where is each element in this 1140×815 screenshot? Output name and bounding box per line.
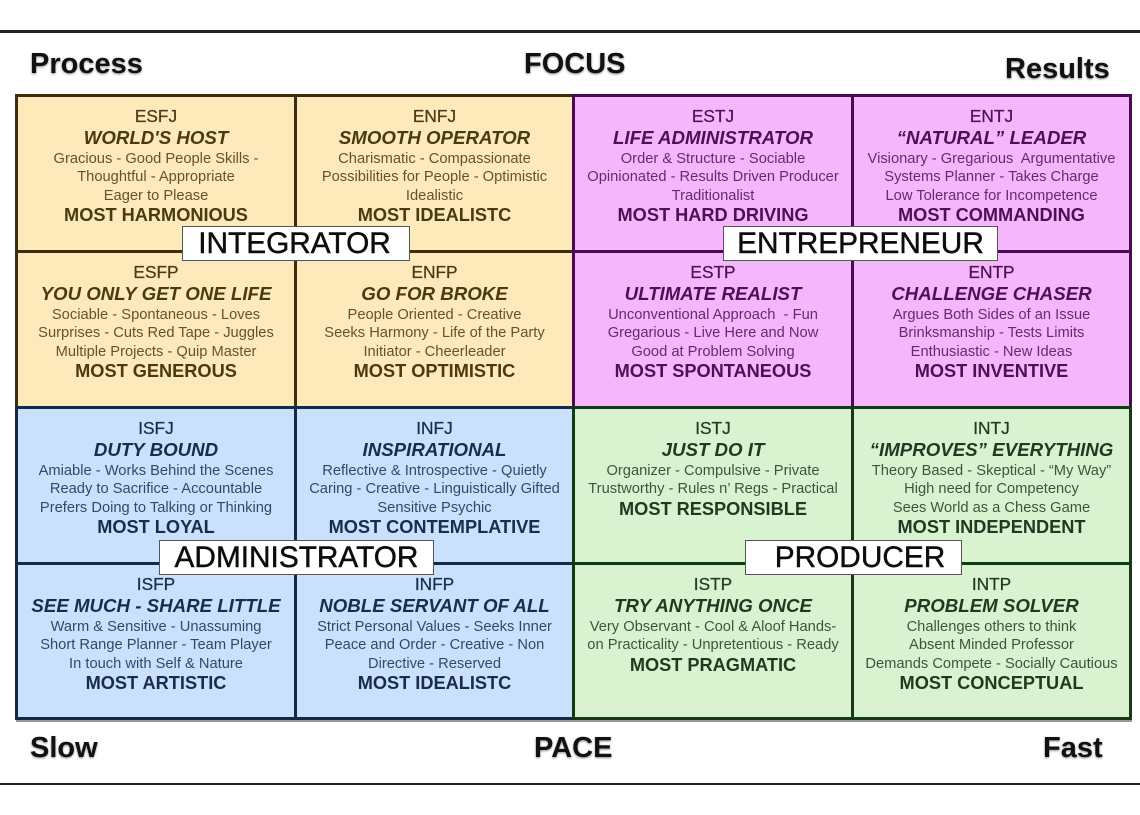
panel: ENTP: Enthusiastic - New Ideas <box>911 344 1072 360</box>
panel: ESTJ: MOST HARD DRIVING <box>618 205 808 225</box>
panel: ISFP: ISFP <box>137 574 175 594</box>
top rule <box>0 30 1140 33</box>
panel: ESTP: Gregarious - Live Here and Now <box>608 325 818 341</box>
panel: ISTP: on Practicality - Unpretentious - Ready <box>587 637 839 653</box>
panel: INTJ: Theory Based - Skeptical - “My Way” <box>872 463 1111 479</box>
panel: INFJ: Sensitive Psychic <box>377 500 492 516</box>
panel: ENFP: ENFP <box>411 262 458 282</box>
panel: INFP: Strict Personal Values - Seeks Inner <box>317 619 552 635</box>
panel: ESTP <box>572 250 854 409</box>
panel: ESTJ <box>572 94 854 253</box>
panel: ESFP: Surprises - Cuts Red Tape - Juggles <box>38 325 274 341</box>
panel: INTP: PROBLEM SOLVER <box>904 595 1079 616</box>
panel: INFJ <box>294 406 575 565</box>
panel: ESFJ: Gracious - Good People Skills - <box>54 151 258 167</box>
panel: ISFJ: ISFJ <box>138 418 174 438</box>
panel: ISFJ: Prefers Doing to Talking or Thinking <box>40 500 272 516</box>
panel: ESFJ: Eager to Please <box>104 188 208 204</box>
panel: ESFJ: MOST HARMONIOUS <box>64 205 248 225</box>
panel: INTJ: Sees World as a Chess Game <box>893 500 1090 516</box>
panel: ISFP: Short Range Planner - Team Player <box>40 637 272 653</box>
panel: ENTP: Argues Both Sides of an Issue <box>893 307 1090 323</box>
axis label: FOCUS: FOCUS <box>524 48 626 80</box>
panel: ESTJ: Traditionalist <box>672 188 754 204</box>
panel: ISFP: Warm & Sensitive - Unassuming <box>51 619 261 635</box>
panel: INTP <box>851 562 1132 720</box>
panel: ISTJ: JUST DO IT <box>662 439 764 460</box>
panel: ESTJ: ESTJ <box>692 106 734 126</box>
panel: ISFP: SEE MUCH - SHARE LITTLE <box>31 595 281 616</box>
panel: ENTJ <box>851 94 1132 253</box>
panel: INFP: INFP <box>415 574 454 594</box>
panel: ENTJ: “NATURAL” LEADER <box>897 127 1086 148</box>
panel: ESFP: Sociable - Spontaneous - Loves <box>52 307 260 323</box>
panel: ESFP: ESFP <box>133 262 179 282</box>
panel: ISTP <box>572 562 854 720</box>
panel: ISTJ <box>572 406 854 565</box>
panel: ESFJ: ESFJ <box>135 106 177 126</box>
panel: INTJ <box>851 406 1132 565</box>
panel: ESFJ <box>15 94 297 253</box>
panel: ESTJ: Opinionated - Results Driven Producer <box>587 169 839 185</box>
panel: INFJ: MOST CONTEMPLATIVE <box>329 517 540 537</box>
panel: ISFJ: DUTY BOUND <box>94 439 218 460</box>
panel: INFP: Peace and Order - Creative - Non <box>325 637 544 653</box>
panel: ESTP: Good at Problem Solving <box>631 344 795 360</box>
panel: ESTP: Unconventional Approach - Fun <box>608 307 818 323</box>
panel: ENFJ: ENFJ <box>413 106 456 126</box>
panel: ESFP: Multiple Projects - Quip Master <box>56 344 256 360</box>
panel: ESFP: MOST GENEROUS <box>75 361 237 381</box>
panel: INFP: Directive - Reserved <box>368 656 501 672</box>
panel: ISFJ <box>15 406 297 565</box>
panel: ENTJ: Low Tolerance for Incompetence <box>885 188 1098 204</box>
panel: ISFJ: MOST LOYAL <box>97 517 215 537</box>
panel: INTP: INTP <box>972 574 1011 594</box>
panel: ENTP: Brinksmanship - Tests Limits <box>899 325 1084 341</box>
axis label: Slow: Slow <box>30 732 98 764</box>
panel: INTJ: INTJ <box>973 418 1010 438</box>
panel: ENFJ: Possibilities for People - Optimistic <box>322 169 547 185</box>
panel: ENFP <box>294 250 575 409</box>
panel: ISTJ: Organizer - Compulsive - Private <box>606 463 820 479</box>
panel: INTP: Demands Compete - Socially Cautious <box>865 656 1118 672</box>
panel: ISTP: ISTP <box>694 574 732 594</box>
panel: ISFJ: Ready to Sacrifice - Accountable <box>50 481 262 497</box>
bottom rule <box>0 783 1140 785</box>
panel: INTJ: “IMPROVES” EVERYTHING <box>870 439 1113 460</box>
axis label: Results: Results <box>1005 53 1110 85</box>
panel: INTP: Challenges others to think <box>907 619 1076 635</box>
panel: ENFJ: Idealistic <box>406 188 463 204</box>
panel: ENTJ: Visionary - Gregarious Argumentative <box>868 151 1115 167</box>
panel: ESFJ: WORLD'S HOST <box>84 127 228 148</box>
panel: ENFJ: Charismatic - Compassionate <box>338 151 531 167</box>
panel: INFJ: INFJ <box>416 418 453 438</box>
panel: INFP <box>294 562 575 720</box>
panel: ENTP: ENTP <box>968 262 1015 282</box>
panel: INFP: MOST IDEALISTC <box>358 673 511 693</box>
panel: INTJ: MOST INDEPENDENT <box>898 517 1085 537</box>
panel: ENFP: Initiator - Cheerleader <box>363 344 506 360</box>
panel: ISTJ: ISTJ <box>695 418 731 438</box>
panel: ESTP: ULTIMATE REALIST <box>625 283 801 304</box>
panel: ISFP: MOST ARTISTIC <box>86 673 226 693</box>
panel: INFP: NOBLE SERVANT OF ALL <box>319 595 550 616</box>
panel: ENFJ: SMOOTH OPERATOR <box>339 127 530 148</box>
panel: INFJ: Reflective & Introspective - Quietly <box>322 463 547 479</box>
panel: ENTP <box>851 250 1132 409</box>
panel: INTP: MOST CONCEPTUAL <box>900 673 1083 693</box>
panel: ESTJ: LIFE ADMINISTRATOR <box>613 127 813 148</box>
label: INTEGRATOR: INTEGRATOR <box>198 227 391 260</box>
panel: INTJ: High need for Competency <box>904 481 1079 497</box>
panel: ESFJ: Thoughtful - Appropriate <box>77 169 235 185</box>
panel: ENFP: Seeks Harmony - Life of the Party <box>324 325 545 341</box>
panel: ENFJ: MOST IDEALISTC <box>358 205 511 225</box>
panel: ISTJ: Trustworthy - Rules n’ Regs - Practical <box>588 481 838 497</box>
panel: ISTP: MOST PRAGMATIC <box>630 655 796 675</box>
panel: ENFP: GO FOR BROKE <box>361 283 508 304</box>
panel: ENTJ: MOST COMMANDING <box>898 205 1085 225</box>
label: PRODUCER: PRODUCER <box>775 541 945 574</box>
panel: ISFP: In touch with Self & Nature <box>69 656 243 672</box>
panel: ENFJ <box>294 94 575 253</box>
panel: ISTP: Very Observant - Cool & Aloof Hands- <box>590 619 836 635</box>
grid shadow <box>16 718 1132 722</box>
panel: ESFP: YOU ONLY GET ONE LIFE <box>41 283 271 304</box>
label: ENTREPRENEUR: ENTREPRENEUR <box>737 227 984 260</box>
panel: ENTJ: Systems Planner - Takes Charge <box>884 169 1099 185</box>
panel: ENTP: CHALLENGE CHASER <box>891 283 1092 304</box>
panel: INFJ: INSPIRATIONAL <box>363 439 506 460</box>
panel: INFJ: Caring - Creative - Linguistically Gifted <box>309 481 560 497</box>
axis label: Process: Process <box>30 48 143 80</box>
panel: ESFP <box>15 250 297 409</box>
panel: ISTJ: MOST RESPONSIBLE <box>619 499 807 519</box>
axis label: PACE: PACE <box>534 732 612 764</box>
panel: ISTP: TRY ANYTHING ONCE <box>614 595 812 616</box>
axis label: Fast: Fast <box>1043 732 1103 764</box>
panel: ENFP: People Oriented - Creative <box>348 307 521 323</box>
label: ADMINISTRATOR: ADMINISTRATOR <box>175 541 418 574</box>
panel: ESTJ: Order & Structure - Sociable <box>621 151 805 167</box>
panel: ENTJ: ENTJ <box>970 106 1013 126</box>
panel: ESTP: ESTP <box>690 262 736 282</box>
panel: ENFP: MOST OPTIMISTIC <box>354 361 515 381</box>
panel: ESTP: MOST SPONTANEOUS <box>615 361 811 381</box>
panel: INTP: Absent Minded Professor <box>909 637 1074 653</box>
panel: ISFJ: Amiable - Works Behind the Scenes <box>39 463 273 479</box>
panel: ISFP <box>15 562 297 720</box>
panel: ENTP: MOST INVENTIVE <box>915 361 1068 381</box>
